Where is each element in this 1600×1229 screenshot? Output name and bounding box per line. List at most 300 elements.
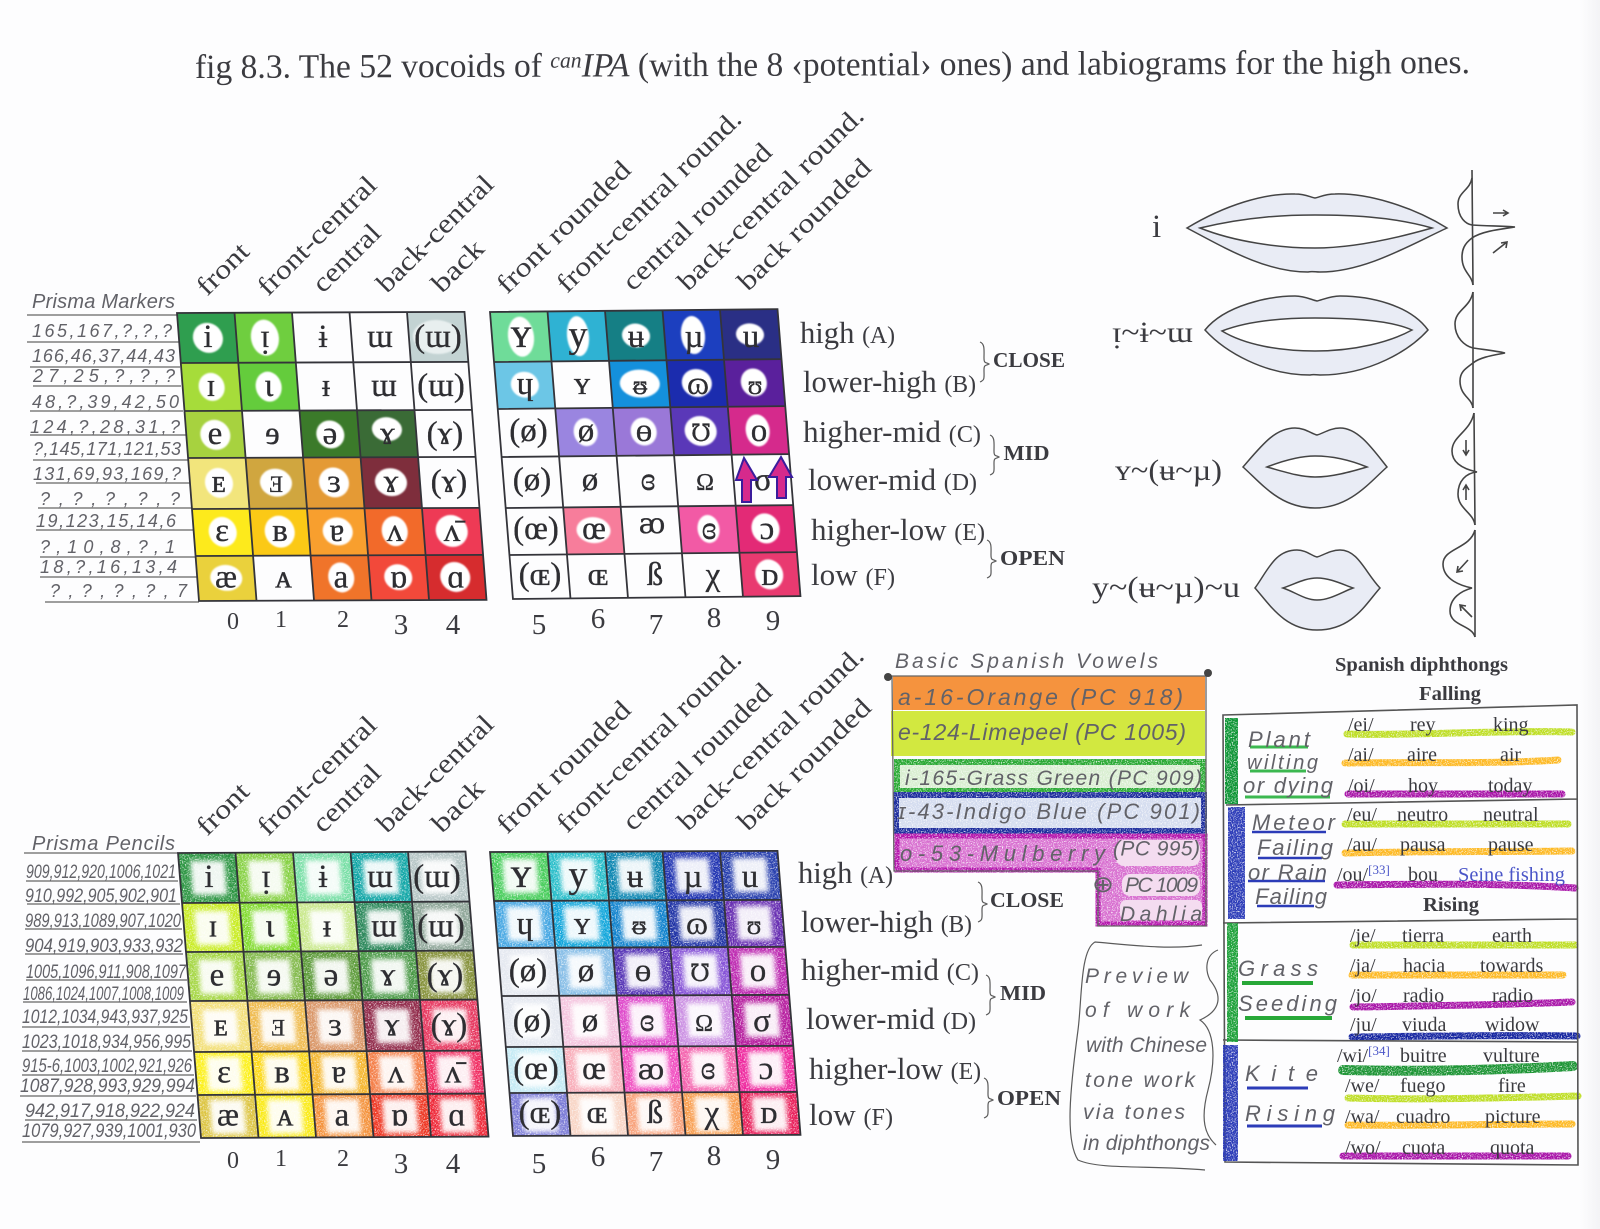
- symbols: pencil chart 5-9: (ø): [509, 953, 547, 989]
- category labels with braces: top chart: OPEN: [1000, 546, 1065, 570]
- column numbers: bottom chart: 2: [337, 1146, 349, 1172]
- category labels with braces: bottom chart: [978, 882, 1064, 1118]
- symbols: pencil chart 0-4: ᴇ: [214, 1008, 228, 1044]
- column headers: bottom: central: [306, 758, 387, 838]
- column numbers: bottom chart: 0: [227, 1148, 239, 1174]
- column numbers: top chart: 4: [446, 609, 461, 641]
- panel: Basic Spanish Vowels key: i-165-Grass Green (PC 909): [905, 767, 1202, 790]
- handwritten falling and rising labels: or dying: [1243, 773, 1334, 798]
- symbols: pencil chart 0-4: ɯ: [367, 859, 393, 895]
- symbols: pencil chart 5-9: (œ): [513, 1051, 559, 1087]
- diphthong rows: /je/: [1350, 925, 1376, 947]
- panel: marker chart, rounded vowels 5-9: [490, 309, 800, 599]
- symbols: pencil chart 0-4: ɩ: [266, 908, 275, 944]
- column headers: top: back-central round.: [671, 100, 870, 296]
- symbols: marker chart 0-4: ɒ: [390, 560, 407, 596]
- labiogram: lower-high unrounded: ᴉ~ɨ~ɯ: [1112, 316, 1193, 349]
- diphthong rows: [34]: [1368, 1043, 1390, 1058]
- symbols: pencil chart 0-4: (ɤ): [431, 1008, 467, 1044]
- symbols: pencil chart 0-4: ᴀ: [277, 1098, 294, 1134]
- diphthong rows: king: [1493, 714, 1529, 736]
- symbols: marker chart 5-9: ɥ: [517, 366, 534, 402]
- sagittal lip profile curves with arrows: [1443, 170, 1515, 637]
- symbols: pencil chart 5-9: (ɶ): [519, 1095, 561, 1131]
- column headers: bottom: back-central round.: [671, 640, 870, 836]
- column headers: top: central rounded: [616, 136, 778, 296]
- column headers: top: front-central round.: [550, 104, 747, 298]
- labiogram: front-central rounded: [1115, 428, 1387, 508]
- diphthong rows: today: [1488, 775, 1532, 797]
- colour bars: [1223, 718, 1245, 1161]
- column headers: bottom: front rounded: [490, 694, 637, 839]
- category labels with braces: top chart: MID: [1004, 441, 1050, 465]
- column headers: top: back rounded: [731, 152, 877, 296]
- symbols: pencil chart 5-9: œ: [582, 1051, 606, 1087]
- row labels: bottom chart: lower-high (B): [801, 904, 972, 939]
- symbols: marker chart 5-9: ʏ: [511, 311, 532, 357]
- symbols: marker chart 0-4: æ: [215, 560, 237, 596]
- panel: Basic Spanish Vowels key: ⊕: [1092, 871, 1114, 897]
- panel: Prisma Pencils code list: Prisma Pencils: [32, 833, 175, 855]
- category labels with braces: bottom chart: MID: [1000, 981, 1046, 1005]
- symbols: pencil chart 5-9: σ: [753, 1003, 771, 1039]
- symbols: pencil chart 5-9: ø: [578, 953, 594, 989]
- symbols: marker chart 5-9: ɞ: [702, 511, 716, 547]
- labiogram: front-central rounded: ʏ~(ʉ~µ): [1115, 454, 1222, 487]
- symbols: marker chart 0-4: ɛ: [215, 513, 229, 549]
- labiogram: fully rounded: [1092, 550, 1380, 630]
- heading: Spanish diphthongs: Spanish diphthongs: [1335, 654, 1508, 676]
- row labels: top chart: high (A): [800, 315, 895, 350]
- symbols: pencil chart 0-4: æ: [217, 1098, 239, 1134]
- panel: Basic Spanish Vowels key: [884, 650, 1212, 926]
- column headers: bottom: front: [190, 776, 255, 841]
- symbols: marker chart 0-4: (ɤ): [427, 416, 463, 452]
- symbols: pencil chart 0-4: ɒ: [391, 1098, 408, 1134]
- symbols: marker chart 5-9: Ω: [696, 470, 714, 496]
- row labels: bottom chart: high (A): [798, 855, 893, 890]
- labiogram: fully rounded: y~(ʉ~µ)~u: [1092, 571, 1240, 604]
- symbols: marker chart 5-9: µ: [684, 319, 704, 355]
- symbols: marker chart 0-4: ʙ: [272, 513, 288, 549]
- column headers: bottom: front-central round.: [550, 644, 747, 838]
- diphthong rows: widow: [1485, 1014, 1540, 1036]
- symbols: pencil chart 0-4: ɯ: [371, 908, 397, 944]
- symbols: pencil chart 0-4: Ǝ: [271, 1016, 285, 1040]
- diphthong rows: /au/: [1347, 834, 1377, 856]
- column headers: top: front: [190, 236, 255, 301]
- diphthong rows: bou: [1408, 864, 1438, 886]
- symbols: marker chart 5-9: ɶ: [588, 557, 608, 593]
- panel: Basic Spanish Vowels key: PC 1009: [1125, 874, 1198, 897]
- symbols: pencil chart 0-4: [204, 859, 467, 1134]
- column headers: bottom: back-central: [370, 709, 499, 838]
- symbols: marker chart 0-4: (ɤ): [431, 464, 467, 500]
- column numbers: top chart: [227, 602, 780, 641]
- column numbers: bottom chart: 1: [275, 1146, 287, 1172]
- panel: Prisma Markers code list: Prisma Markers: [32, 291, 175, 313]
- handwritten falling and rising labels: wilting: [1247, 752, 1318, 774]
- symbols: marker chart 5-9: σ: [754, 462, 772, 498]
- callout: Preview of work note: in diphthongs: [1083, 1132, 1210, 1155]
- column headers: top: front-central: [251, 170, 383, 301]
- title: can: [550, 48, 582, 73]
- symbols: marker chart 5-9: ɵ: [636, 413, 652, 449]
- diphthong rows: pausa: [1400, 834, 1446, 856]
- symbols: marker chart 0-4: ᴉ: [260, 319, 270, 355]
- panel: Prisma Markers code list: 166,46,37,44,43: [32, 346, 175, 366]
- symbols: pencil chart 5-9: (ø): [513, 1003, 551, 1039]
- handwritten falling and rising labels: or Rain: [1248, 860, 1327, 885]
- column numbers: bottom chart: 8: [707, 1140, 721, 1172]
- labiogram: lower-high unrounded: [1112, 296, 1428, 375]
- diphthong rows: towards: [1480, 955, 1544, 977]
- row labels: bottom chart: higher-low (E): [809, 1051, 981, 1086]
- heading: Basic Spanish Vowels: Basic Spanish Vowels: [895, 650, 1158, 673]
- symbols: marker chart 5-9: ℧: [691, 421, 711, 447]
- panel: Basic Spanish Vowels key: ɪ-43-Indigo Blue (PC 901): [897, 799, 1200, 824]
- labiogram: i: [1152, 194, 1447, 272]
- symbols: marker chart 0-4: (ɯ): [414, 319, 462, 355]
- symbols: marker chart 5-9: ø: [578, 413, 594, 449]
- panel: Prisma Pencils code list: 989,913,1089,907,1020: [25, 911, 181, 932]
- column numbers: bottom chart: 7: [649, 1146, 663, 1178]
- symbols: pencil chart 0-4: ɪ: [208, 908, 218, 944]
- diphthong rows: [33]: [1368, 862, 1390, 877]
- symbols: pencil chart 0-4: ɑ: [448, 1098, 466, 1134]
- symbols: marker chart 0-4: ɑ: [447, 560, 465, 596]
- diphthong rows: radio: [1403, 985, 1444, 1007]
- panel: Basic Spanish Vowels key: o-53-Mulberry: [900, 841, 1107, 866]
- diphthong rows: /wo/: [1345, 1137, 1381, 1159]
- symbols: pencil chart 5-9: ɥ: [517, 906, 534, 942]
- symbols: marker chart 0-4: ɩ: [265, 368, 274, 404]
- panel: Prisma Pencils code list: 942,917,918,922,924: [25, 1101, 195, 1122]
- symbols: marker chart 0-4: (ɯ): [417, 368, 465, 404]
- symbols: pencil chart 5-9: y: [568, 854, 588, 896]
- panel: Prisma Markers code list: ?,10,8,?,1: [40, 537, 175, 557]
- category labels with braces: top chart: [980, 342, 1065, 578]
- handwritten falling and rising labels: Kite: [1245, 1061, 1318, 1086]
- diphthong rows: neutral: [1483, 804, 1539, 826]
- symbols: pencil chart 0-4: ɐ: [332, 1054, 346, 1090]
- symbols: marker chart 5-9: [509, 311, 779, 593]
- symbols: marker chart 0-4: ɯ: [367, 319, 393, 355]
- row labels: bottom chart: low (F): [809, 1097, 893, 1132]
- symbols: pencil chart 5-9: ß: [647, 1095, 663, 1131]
- symbols: pencil chart 5-9: ɵ: [635, 953, 651, 989]
- symbols: pencil chart 5-9: u: [742, 859, 758, 895]
- symbols: marker chart 5-9: (ø): [509, 413, 548, 449]
- callout: Preview of work note: with Chinese: [1086, 1034, 1207, 1057]
- diphthong rows: buitre: [1400, 1045, 1447, 1067]
- symbols: marker chart 0-4: a: [334, 560, 349, 596]
- symbols: pencil chart 0-4: ɛ: [217, 1054, 231, 1090]
- symbols: pencil chart 5-9: ɷ: [686, 906, 708, 942]
- panel: Prisma Pencils code list: 915-6,1003,1002,921,926: [22, 1056, 192, 1077]
- column numbers: bottom chart: [227, 1140, 780, 1180]
- column numbers: bottom chart: 5: [532, 1148, 546, 1180]
- column numbers: top chart: 7: [649, 609, 663, 641]
- column headers: bottom: central rounded: [616, 676, 778, 836]
- diphthong rows: aire: [1407, 744, 1437, 766]
- symbols: pencil chart 0-4: ə: [324, 958, 338, 994]
- symbols: marker chart 0-4: ɪ: [206, 368, 216, 404]
- diphthong rows: fuego: [1400, 1075, 1446, 1097]
- panel: Prisma Markers code list: 19,123,15,14,6: [36, 511, 177, 531]
- symbols: pencil chart 0-4: (ɯ): [417, 908, 465, 944]
- diphthong rows: /we/: [1345, 1075, 1380, 1097]
- symbols: pencil chart 5-9: o: [750, 953, 766, 989]
- symbols: marker chart 5-9: ʏ: [574, 366, 591, 402]
- symbols: marker chart 5-9: y: [568, 314, 588, 356]
- title: fig 8.3. The 52 vocoids of: [195, 48, 547, 86]
- symbols: marker chart 5-9: œ: [582, 511, 606, 547]
- symbols: marker chart 5-9: ʉ: [628, 319, 644, 355]
- column headers: bottom: front-central: [251, 710, 383, 841]
- row labels: top chart: higher-mid (C): [803, 414, 981, 449]
- symbols: pencil chart 5-9: Ω: [695, 1011, 713, 1037]
- panel: Prisma Markers code list: 124,?,28,31,?: [30, 417, 180, 437]
- diphthong rows: /wi/: [1337, 1045, 1369, 1067]
- column headers: top: central: [306, 218, 387, 298]
- symbols: marker chart 5-9: ɞ: [641, 462, 655, 498]
- panel: Prisma Pencils code list: 910,992,905,902,901: [25, 886, 177, 907]
- row labels: top chart: higher-low (E): [811, 512, 985, 547]
- symbols: marker chart 0-4: ʌ: [387, 513, 404, 549]
- column numbers: bottom chart: 3: [394, 1148, 408, 1180]
- column headers: top: back-central: [370, 169, 499, 298]
- column numbers: top chart: 3: [394, 609, 408, 641]
- panel: Prisma Markers code list: [27, 291, 199, 602]
- column numbers: top chart: 5: [532, 609, 546, 641]
- diphthong rows: cuadro: [1396, 1106, 1450, 1128]
- diphthong rows: fire: [1498, 1075, 1526, 1097]
- panel: Spanish diphthongs table: [1223, 705, 1578, 1165]
- symbols: marker chart 0-4: ʌ̄: [444, 513, 466, 549]
- symbols: marker chart 5-9: ɔ: [760, 511, 774, 547]
- diphthong rows: /ai/: [1348, 744, 1374, 766]
- symbols: marker chart 0-4: e: [208, 416, 222, 452]
- symbols: pencil chart 0-4: ᴉ: [261, 859, 271, 895]
- symbols: pencil chart 0-4: ᵻ: [322, 908, 332, 944]
- title: (with the 8 ‹potential› ones) and labiograms for the high ones.: [638, 44, 1481, 84]
- panel: Prisma Markers code list: 131,69,93,169,?: [33, 464, 181, 484]
- symbols: marker chart 5-9: (ø): [513, 462, 551, 498]
- diphthong rows: /ei/: [1348, 714, 1374, 736]
- symbols: pencil chart 0-4: ɤ: [385, 1008, 400, 1044]
- category labels with braces: bottom chart: CLOSE: [990, 888, 1064, 912]
- diphthong rows: /eu/: [1347, 804, 1377, 826]
- symbols: pencil chart 0-4: ɨ: [318, 859, 328, 895]
- symbols: marker chart 5-9: ᵿ: [633, 370, 648, 400]
- symbols: marker chart 5-9: ꜵ: [639, 509, 665, 540]
- panel: pencil chart, unrounded vowels 0-4: [178, 852, 489, 1138]
- symbols: pencil chart 5-9: ʉ: [627, 859, 643, 895]
- table frame: [1223, 705, 1578, 1165]
- diphthong rows: Seine fishing: [1458, 864, 1565, 886]
- symbols: pencil chart 5-9: ʏ: [511, 851, 532, 897]
- symbols: pencil chart 0-4: ʌ̄: [445, 1054, 467, 1090]
- symbols: marker chart 0-4: ᴇ: [212, 464, 226, 500]
- symbols: marker chart 0-4: [203, 319, 467, 596]
- handwritten falling and rising labels: Failing: [1257, 835, 1334, 860]
- panel: Basic Spanish Vowels key: Dahlia: [1120, 903, 1202, 926]
- symbols: pencil chart 0-4: ʙ: [274, 1054, 290, 1090]
- diphthong rows: /jo/: [1350, 985, 1377, 1007]
- row labels: top chart: [800, 315, 985, 592]
- category labels with braces: top chart: CLOSE: [993, 348, 1065, 372]
- symbols: pencil chart 0-4: (ɤ): [427, 958, 463, 994]
- title: IPA: [581, 47, 630, 85]
- panel: Prisma Markers code list: ?,?,?,?,7: [50, 581, 188, 601]
- labiogram: i: i: [1152, 209, 1161, 245]
- symbols: marker chart 5-9: ᴅ: [761, 557, 779, 593]
- handwritten falling and rising labels: Failing: [1255, 884, 1328, 909]
- symbols: marker chart 0-4: ᵻ: [321, 368, 331, 404]
- symbols: marker chart 0-4: ɤ: [384, 464, 399, 500]
- symbols: pencil chart 5-9: ɶ: [587, 1095, 607, 1131]
- column numbers: top chart: 0: [227, 609, 239, 635]
- diphthong rows: cuota: [1402, 1137, 1445, 1159]
- callout: Preview of work note: of work: [1085, 999, 1192, 1022]
- symbols: marker chart 0-4: ɘ: [265, 416, 280, 452]
- diphthong rows: earth: [1492, 925, 1532, 947]
- handwritten falling and rising labels: Grass: [1238, 956, 1318, 981]
- handwritten falling and rising labels: Rising: [1245, 1101, 1336, 1126]
- column headers: bottom: back: [425, 773, 491, 838]
- panel: Prisma Markers code list: 165,167,?,?,?: [32, 321, 172, 341]
- column headers: top: front rounded: [490, 154, 637, 299]
- row labels: top chart: lower-mid (D): [808, 462, 977, 497]
- symbols: marker chart 5-9: χ: [705, 557, 721, 593]
- symbols: pencil chart 0-4: a: [335, 1098, 350, 1134]
- symbols: marker chart 0-4: Ǝ: [269, 472, 283, 497]
- diphthong rows: [1337, 714, 1565, 1159]
- panel: Prisma Markers code list: ?,145,171,121,53: [33, 439, 181, 459]
- panel: Basic Spanish Vowels key: e-124-Limepeel (PC 1005): [898, 719, 1186, 745]
- diphthong rows: neutro: [1397, 804, 1448, 826]
- symbols: marker chart 0-4: ɤ: [380, 416, 395, 452]
- diphthong rows: pause: [1488, 834, 1534, 856]
- symbols: pencil chart 5-9: ɔ: [759, 1051, 773, 1087]
- diphthong rows: quota: [1490, 1137, 1535, 1159]
- symbols: marker chart 5-9: (ɶ): [519, 557, 561, 593]
- symbols: pencil chart 0-4: ʌ: [388, 1054, 405, 1090]
- column numbers: top chart: 2: [337, 607, 349, 633]
- symbols: pencil chart 5-9: χ: [704, 1095, 720, 1131]
- symbols: pencil chart 5-9: ℧: [690, 961, 710, 987]
- column headers: bottom: [190, 640, 877, 841]
- diphthong rows: /oi/: [1348, 775, 1375, 797]
- panel: Prisma Markers code list: ?,?,?,?,?: [40, 489, 180, 509]
- panel: Prisma Pencils code list: [20, 833, 200, 1142]
- column numbers: top chart: 8: [707, 602, 721, 634]
- diphthong rows: viuda: [1402, 1014, 1447, 1036]
- panel: Prisma Pencils code list: 1086,1024,1007,1008,1009: [23, 984, 184, 1005]
- symbols: pencil chart 5-9: ʊ: [747, 910, 761, 940]
- column headers: top: [190, 100, 877, 301]
- handwritten falling and rising labels: Seeding: [1238, 991, 1338, 1016]
- symbols: pencil chart 5-9: ꜵ: [638, 1055, 664, 1086]
- callout: Preview of work note: [1070, 942, 1218, 1170]
- symbols: pencil chart 5-9: µ: [683, 859, 703, 895]
- column numbers: top chart: 1: [275, 607, 287, 633]
- column numbers: bottom chart: 9: [766, 1144, 780, 1176]
- symbols: marker chart 0-4: ɐ: [330, 513, 344, 549]
- diphthong rows: air: [1500, 744, 1521, 766]
- row labels: top chart: low (F): [811, 557, 895, 592]
- symbols: marker chart 5-9: ʊ: [748, 370, 762, 400]
- symbols: pencil chart 5-9: ᵿ: [632, 910, 647, 940]
- column numbers: bottom chart: 6: [591, 1141, 605, 1173]
- callout: Preview of work note: via tones: [1083, 1101, 1186, 1124]
- column numbers: bottom chart: 4: [446, 1148, 461, 1180]
- symbols: marker chart 0-4: i: [203, 319, 213, 355]
- diphthong rows: /wa/: [1345, 1106, 1380, 1128]
- symbols: pencil chart 0-4: ɤ: [381, 958, 396, 994]
- symbols: marker chart 5-9: ß: [647, 557, 663, 593]
- column headers: bottom: back rounded: [731, 692, 877, 836]
- panel: Prisma Pencils code list: 1023,1018,934,956,995: [22, 1032, 191, 1053]
- callout: Preview of work note: tone work: [1085, 1069, 1196, 1092]
- panel: Prisma Pencils code list: 1012,1034,943,937,925: [22, 1007, 188, 1028]
- symbols: pencil chart 0-4: e: [210, 958, 224, 994]
- diphthong rows: hacia: [1403, 955, 1445, 977]
- diphthong rows: vulture: [1483, 1045, 1540, 1067]
- symbols: pencil chart 5-9: ø: [582, 1003, 598, 1039]
- symbols: pencil chart 0-4: i: [204, 859, 214, 895]
- panel: Prisma Pencils code list: 909,912,920,1006,1021: [26, 862, 176, 883]
- symbols: marker chart 5-9: o: [751, 413, 767, 449]
- symbols: marker chart 5-9: ø: [582, 462, 598, 498]
- handwritten falling and rising labels: Meteor: [1252, 810, 1337, 835]
- panel: pencil chart, rounded vowels 5-9: [490, 851, 801, 1136]
- diphthong rows: hoy: [1408, 775, 1438, 797]
- symbols: pencil chart 0-4: ɘ: [267, 958, 281, 994]
- diphthong rows: /ja/: [1350, 955, 1376, 977]
- symbols: pencil chart 5-9: ɞ: [701, 1051, 715, 1087]
- symbols: pencil chart 5-9: ɞ: [640, 1003, 654, 1039]
- symbols: marker chart 5-9: (œ): [513, 511, 559, 547]
- row labels: top chart: lower-high (B): [803, 364, 976, 399]
- symbols: pencil chart 0-4: (ɯ): [413, 859, 461, 895]
- panel: Basic Spanish Vowels key: (PC 995): [1113, 838, 1200, 860]
- symbols: marker chart 0-4: ɨ: [318, 319, 328, 355]
- symbols: pencil chart 0-4: ɜ: [328, 1008, 342, 1044]
- panel: Prisma Pencils code list: 1005,1096,911,908,1097: [26, 962, 187, 983]
- column numbers: top chart: 6: [591, 603, 605, 635]
- row labels: bottom chart: higher-mid (C): [801, 952, 979, 987]
- handwritten falling and rising labels: Plant: [1248, 727, 1311, 752]
- column headers: top: back: [425, 233, 491, 298]
- handwritten falling and rising labels: [1238, 727, 1338, 1126]
- panel: Prisma Markers code list: 48,?,39,42,50: [32, 392, 179, 412]
- symbols: marker chart 0-4: ɯ: [371, 368, 397, 404]
- symbols: marker chart 0-4: ɜ: [327, 464, 341, 500]
- category labels with braces: bottom chart: OPEN: [997, 1086, 1061, 1110]
- diphthong rows: tierra: [1402, 925, 1444, 947]
- row labels: bottom chart: [798, 855, 981, 1132]
- diphthong rows: picture: [1485, 1106, 1541, 1128]
- panel: Prisma Markers code list: 27,25,?,?,?: [32, 366, 175, 386]
- colour highlights: [1337, 732, 1578, 1156]
- callout: Preview of work note: Preview: [1085, 965, 1190, 988]
- row labels: bottom chart: lower-mid (D): [806, 1001, 976, 1036]
- symbols: marker chart 0-4: ə: [323, 416, 337, 452]
- panel: Prisma Pencils code list: 1079,927,939,1001,930: [22, 1121, 196, 1142]
- symbols: pencil chart 5-9: ʏ: [574, 906, 591, 942]
